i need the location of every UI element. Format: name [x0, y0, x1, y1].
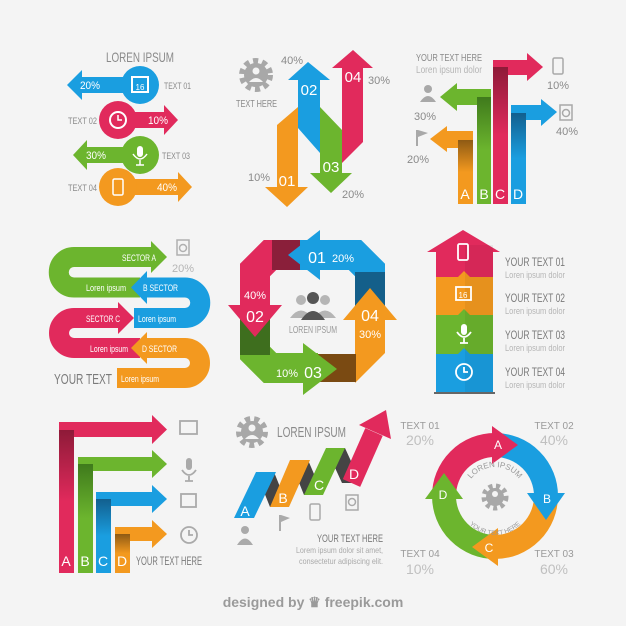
panel: up/down arrows 01-04: 30%	[368, 75, 390, 87]
panel: up/down arrows 01-04: 10%	[248, 172, 270, 184]
cycle labels: 01	[308, 250, 326, 267]
green arrow B	[78, 450, 167, 573]
head blue	[288, 230, 320, 280]
icon: people	[290, 292, 336, 320]
letters: B	[278, 490, 288, 506]
letters: C	[314, 477, 324, 493]
orange band D sector	[117, 348, 200, 378]
labels: 02	[301, 82, 317, 99]
icon: gear	[239, 419, 265, 445]
letters: D	[513, 186, 523, 202]
snake labels: Loren ipsum	[86, 283, 126, 293]
panel: zigzag ribbon chart: consectetur adipiscing elit.	[299, 556, 383, 566]
icon: search document	[177, 240, 189, 255]
cycle labels: 04	[361, 308, 379, 325]
icons	[456, 244, 472, 380]
arrow 03 green	[310, 107, 352, 193]
corner labels: TEXT 03	[534, 549, 574, 560]
panel: vertical stacked arrow: Loren ipsum dolor	[505, 306, 565, 316]
letters: D	[349, 466, 359, 482]
row 1 blue arrow: 16	[136, 83, 145, 92]
center gear and arc text: YOUR TEXT HERE	[470, 521, 520, 536]
letters: A	[61, 553, 71, 569]
panel: zigzag ribbon chart: LOREN IPSUM	[277, 424, 346, 441]
arrow 02 blue	[288, 62, 330, 153]
arrow 04 red	[332, 50, 373, 163]
letters	[61, 553, 127, 569]
red band sector C	[59, 318, 140, 348]
row 1 blue arrow: 20%	[80, 80, 100, 92]
green bottom/left band	[255, 305, 318, 368]
blue arrow C	[96, 485, 167, 573]
green band sector A	[59, 257, 155, 288]
panel: circular cycle ABCD: 20%	[406, 432, 434, 448]
cycle labels: 30%	[359, 329, 381, 341]
red left band	[255, 255, 303, 306]
panel: vertical stacked arrow: Loren ipsum dolor	[505, 270, 565, 280]
letters: A	[460, 186, 470, 202]
column A orange	[430, 126, 473, 204]
stack labels: YOUR TEXT 01	[505, 255, 565, 269]
center gear and arc text	[467, 461, 522, 536]
heading: YOUR TEXT HERE	[416, 53, 482, 64]
panel: ABCD turning arrows	[407, 53, 578, 204]
row 4 orange arrow: 40%	[157, 182, 177, 194]
red arrow D	[352, 410, 391, 483]
panel: L-shaped ABCD arrows	[59, 415, 202, 573]
panel: ABCD turning arrows: 20%	[407, 154, 429, 166]
blue top/right band	[300, 255, 370, 320]
your text: YOUR TEXT	[54, 371, 112, 388]
orange arrow D	[115, 520, 167, 573]
panel: circular cycle ABCD: 10%	[406, 561, 434, 577]
panel: circular cycle ABCD: 40%	[540, 432, 568, 448]
snake labels: D SECTOR	[142, 344, 177, 354]
icons and percentages	[416, 58, 572, 146]
description text: YOUR TEXT HERE	[317, 533, 383, 545]
panel: circular cycle ABCD: C	[485, 541, 494, 555]
letters: D	[117, 553, 127, 569]
panel: circular cycle ABCD: 60%	[540, 561, 568, 577]
cycle labels: 02	[246, 309, 264, 326]
snake labels: SECTOR C	[86, 314, 120, 324]
head green	[303, 343, 337, 395]
panel: ABCD turning arrows: 10%	[547, 80, 569, 92]
red arrow A	[59, 415, 167, 573]
snake labels: Loren ipsum	[138, 314, 176, 324]
panel: circle arrows list	[67, 49, 192, 206]
head orange	[343, 288, 397, 320]
snake labels: SECTOR A	[122, 253, 156, 263]
panel: up/down arrows 01-04: 20%	[342, 189, 364, 201]
panel: circular cycle ABCD: D	[439, 488, 448, 502]
panel: snake sectors: 20%	[172, 263, 194, 275]
panel: circular cycle ABCD: A	[494, 438, 502, 452]
panel: vertical stacked arrow	[427, 230, 565, 394]
panel: vertical stacked arrow: Loren ipsum dolor	[505, 343, 565, 353]
corner labels: TEXT 02	[534, 421, 574, 432]
panel: circular cycle ABCD: B	[543, 492, 551, 506]
panel: vertical stacked arrow: 16	[459, 291, 468, 300]
cycle labels	[244, 250, 381, 382]
snake labels	[86, 253, 178, 384]
center gear and arc text: LOREN IPSUM	[467, 461, 522, 478]
row 2 red arrow: 10%	[148, 115, 168, 127]
row 2 red arrow: TEXT 02	[68, 116, 97, 126]
green block	[436, 309, 493, 354]
labels	[279, 69, 361, 190]
row 3 green arrow	[73, 136, 190, 174]
cycle labels: 40%	[244, 290, 266, 302]
ribbon folds	[256, 472, 288, 507]
panel: circular cycle ABCD	[400, 421, 574, 577]
corner labels: TEXT 01	[400, 421, 440, 432]
letters: A	[240, 503, 250, 519]
panel: L-shaped ABCD arrows: YOUR TEXT HERE	[136, 554, 202, 568]
heads	[492, 426, 518, 464]
panel: zigzag ribbon chart: Lorem ipsum dolor sit amet,	[296, 545, 383, 555]
head red	[228, 305, 282, 337]
snake labels: B SECTOR	[143, 283, 178, 293]
letters	[240, 466, 359, 519]
orange block	[436, 271, 493, 315]
panel: snake sectors	[54, 240, 200, 388]
row 4 orange arrow: TEXT 04	[68, 183, 97, 193]
cycle labels: 20%	[332, 253, 354, 265]
labels: 01	[279, 173, 295, 190]
icons	[180, 421, 197, 543]
cycle labels: 03	[304, 365, 322, 382]
corner labels: TEXT 04	[400, 549, 440, 560]
row 3 green arrow: 30%	[86, 150, 106, 162]
letters: C	[98, 553, 108, 569]
stack labels	[505, 255, 565, 379]
snake labels: Loren ipsum	[121, 374, 159, 384]
panel: zigzag ribbon chart	[234, 410, 391, 566]
arrow 01 orange	[265, 107, 308, 207]
footer credit: designed by ♛ freepik.com	[223, 594, 403, 610]
row 2 red arrow	[68, 101, 178, 139]
panel: ABCD turning arrows: 40%	[556, 126, 578, 138]
snake labels: Loren ipsum	[90, 344, 128, 354]
panel: up/down arrows 01-04	[236, 50, 390, 207]
panel: up/down arrows 01-04: 40%	[281, 55, 303, 67]
stack labels: YOUR TEXT 03	[505, 328, 565, 342]
row 4 orange arrow	[68, 168, 192, 206]
panel: square cycle: LOREN IPSUM	[289, 325, 337, 336]
labels: 04	[345, 69, 361, 86]
row 1 blue arrow: TEXT 01	[164, 81, 191, 91]
heading: loren ipsum: LOREN IPSUM	[106, 49, 174, 65]
stack labels: YOUR TEXT 04	[505, 365, 565, 379]
panel: ABCD turning arrows: Loren ipsum dolor	[416, 65, 483, 76]
stack labels: YOUR TEXT 02	[505, 291, 565, 305]
column C red	[493, 53, 543, 204]
panel: vertical stacked arrow: Loren ipsum dolor	[505, 380, 565, 390]
panel: ABCD turning arrows: 30%	[414, 111, 436, 123]
column B green	[440, 83, 491, 204]
row 1 blue arrow	[67, 66, 191, 104]
column D blue	[511, 99, 557, 204]
letters	[460, 186, 523, 202]
row 3 green arrow: TEXT 03	[162, 151, 190, 161]
ribbon segments	[234, 472, 276, 518]
letters: B	[80, 553, 90, 569]
letters: B	[479, 186, 489, 202]
labels: 03	[323, 159, 339, 176]
icon: gear	[242, 61, 270, 89]
corner labels	[400, 421, 574, 560]
cycle labels: 10%	[276, 368, 298, 380]
orange right band	[355, 320, 385, 383]
blue block	[436, 348, 493, 393]
text here label: TEXT HERE	[236, 99, 277, 110]
red top block with head	[427, 230, 500, 277]
ring arcs	[495, 445, 546, 496]
blue band B sector	[134, 288, 200, 318]
panel: square cycle	[228, 230, 397, 395]
icons	[237, 495, 358, 545]
letters: C	[495, 186, 505, 202]
